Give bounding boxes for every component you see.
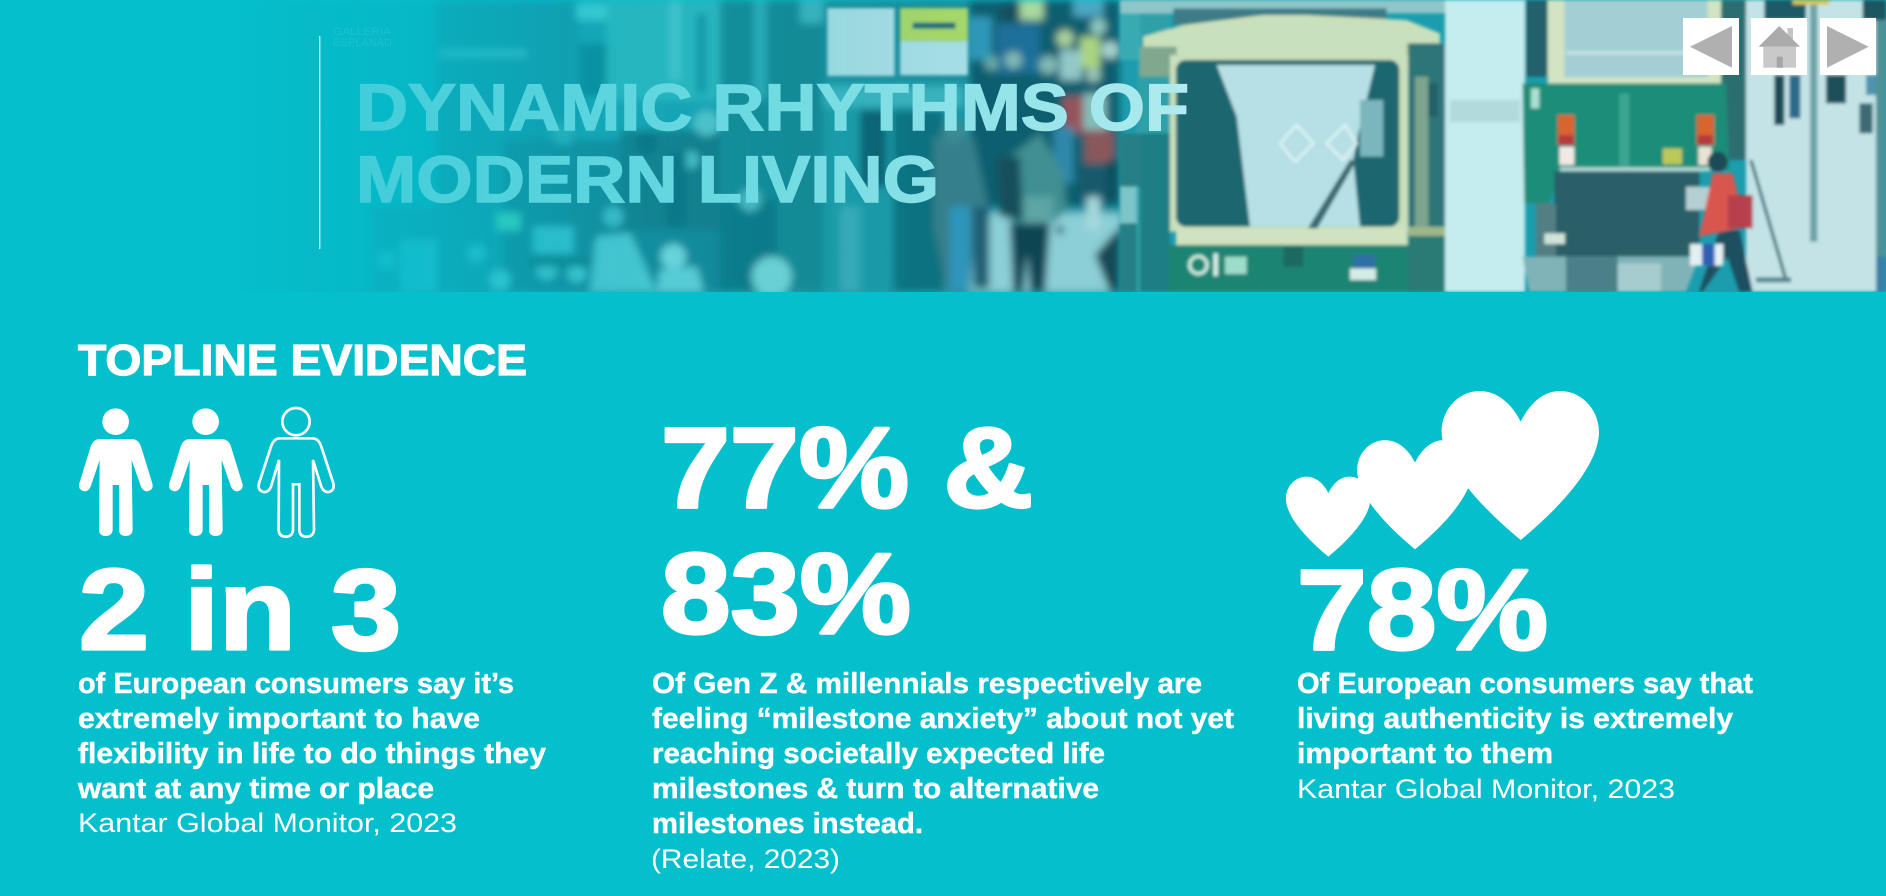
faint sign text in photo [333,26,392,49]
photo: teal fade overlay [0,0,888,292]
photo: notice panels [827,8,968,76]
header photo: street scene with trams and crowd [368,0,1886,292]
description: living authentically: important to them [1297,738,1553,770]
description: 2 in 3: want at any time or place [77,773,434,805]
big stat: 2 in 3: 2 in 3 [79,547,401,674]
photo: background walkers and poles [1774,75,1784,125]
photo: pedestrian [1699,230,1753,292]
title: MODERN LIVING [356,142,939,216]
panel: 78% [1286,391,1753,804]
photo: white road [1445,0,1525,292]
title: DYNAMIC RHYTHMS OF [356,70,1189,144]
title divider line [319,36,320,249]
description: milestone anxiety: (Relate, 2023) [651,844,840,874]
big stat: 77% & 83% [661,405,1033,658]
description: living authentically: Kantar Global Monitor, 2023 [1297,774,1675,804]
description: living authentically: Of European consumers say that [1297,668,1753,700]
description: milestone anxiety: milestones instead. [652,808,923,840]
big stat: 77% & 83%: 83% [661,531,911,658]
description: 2 in 3: flexibility in life to do things they [78,738,546,770]
navigation buttons [1683,18,1876,75]
description: milestone anxiety: Of Gen Z & millennials respectively are [652,668,1202,700]
photo: tram one [1120,0,1445,292]
faint sign text in photo: GALLERIA [333,26,392,38]
photo: upper crowd [970,0,1120,207]
icon: filled person two [169,408,243,536]
photo: walking figures [933,137,990,292]
button: next [1820,18,1876,75]
big stat: 78%: 78% [1297,547,1548,674]
photo: buildings left [442,0,722,135]
title [356,70,1189,216]
panel: 2 in 3 [77,408,546,838]
description: living authentically [1297,668,1753,804]
description: 2 in 3 [77,668,546,838]
photo: centre street [720,0,1120,297]
photo: tram two and pavement [1523,0,1886,292]
panel: 77% and 83% [651,405,1234,874]
description: 2 in 3: Kantar Global Monitor, 2023 [78,808,457,838]
description: milestone anxiety: feeling “milestone anxiety” about not yet [652,703,1234,735]
icon: filled person one [79,408,153,536]
big stat: 77% & 83%: 77% & [661,405,1033,532]
button: home [1751,18,1807,75]
icon: outlined person [259,408,334,537]
photo: pavement [967,213,1120,292]
description: 2 in 3: of European consumers say it’s [78,668,514,700]
description: living authentically: living authenticity is extremely [1297,703,1733,735]
section heading: TOPLINE EVIDENCE [78,336,527,385]
icon: people, two of three filled [79,408,334,537]
button: previous [1683,18,1739,75]
faint sign text in photo: ESPLANAD [333,37,392,49]
description: milestone anxiety: milestones & turn to alternative [652,773,1099,805]
description: milestone anxiety: reaching societally expected life [652,738,1105,770]
icon: three hearts [1286,391,1599,557]
photo: crowd left [370,111,720,292]
description: 2 in 3: extremely important to have [78,703,480,735]
description: milestone anxiety [651,668,1234,874]
